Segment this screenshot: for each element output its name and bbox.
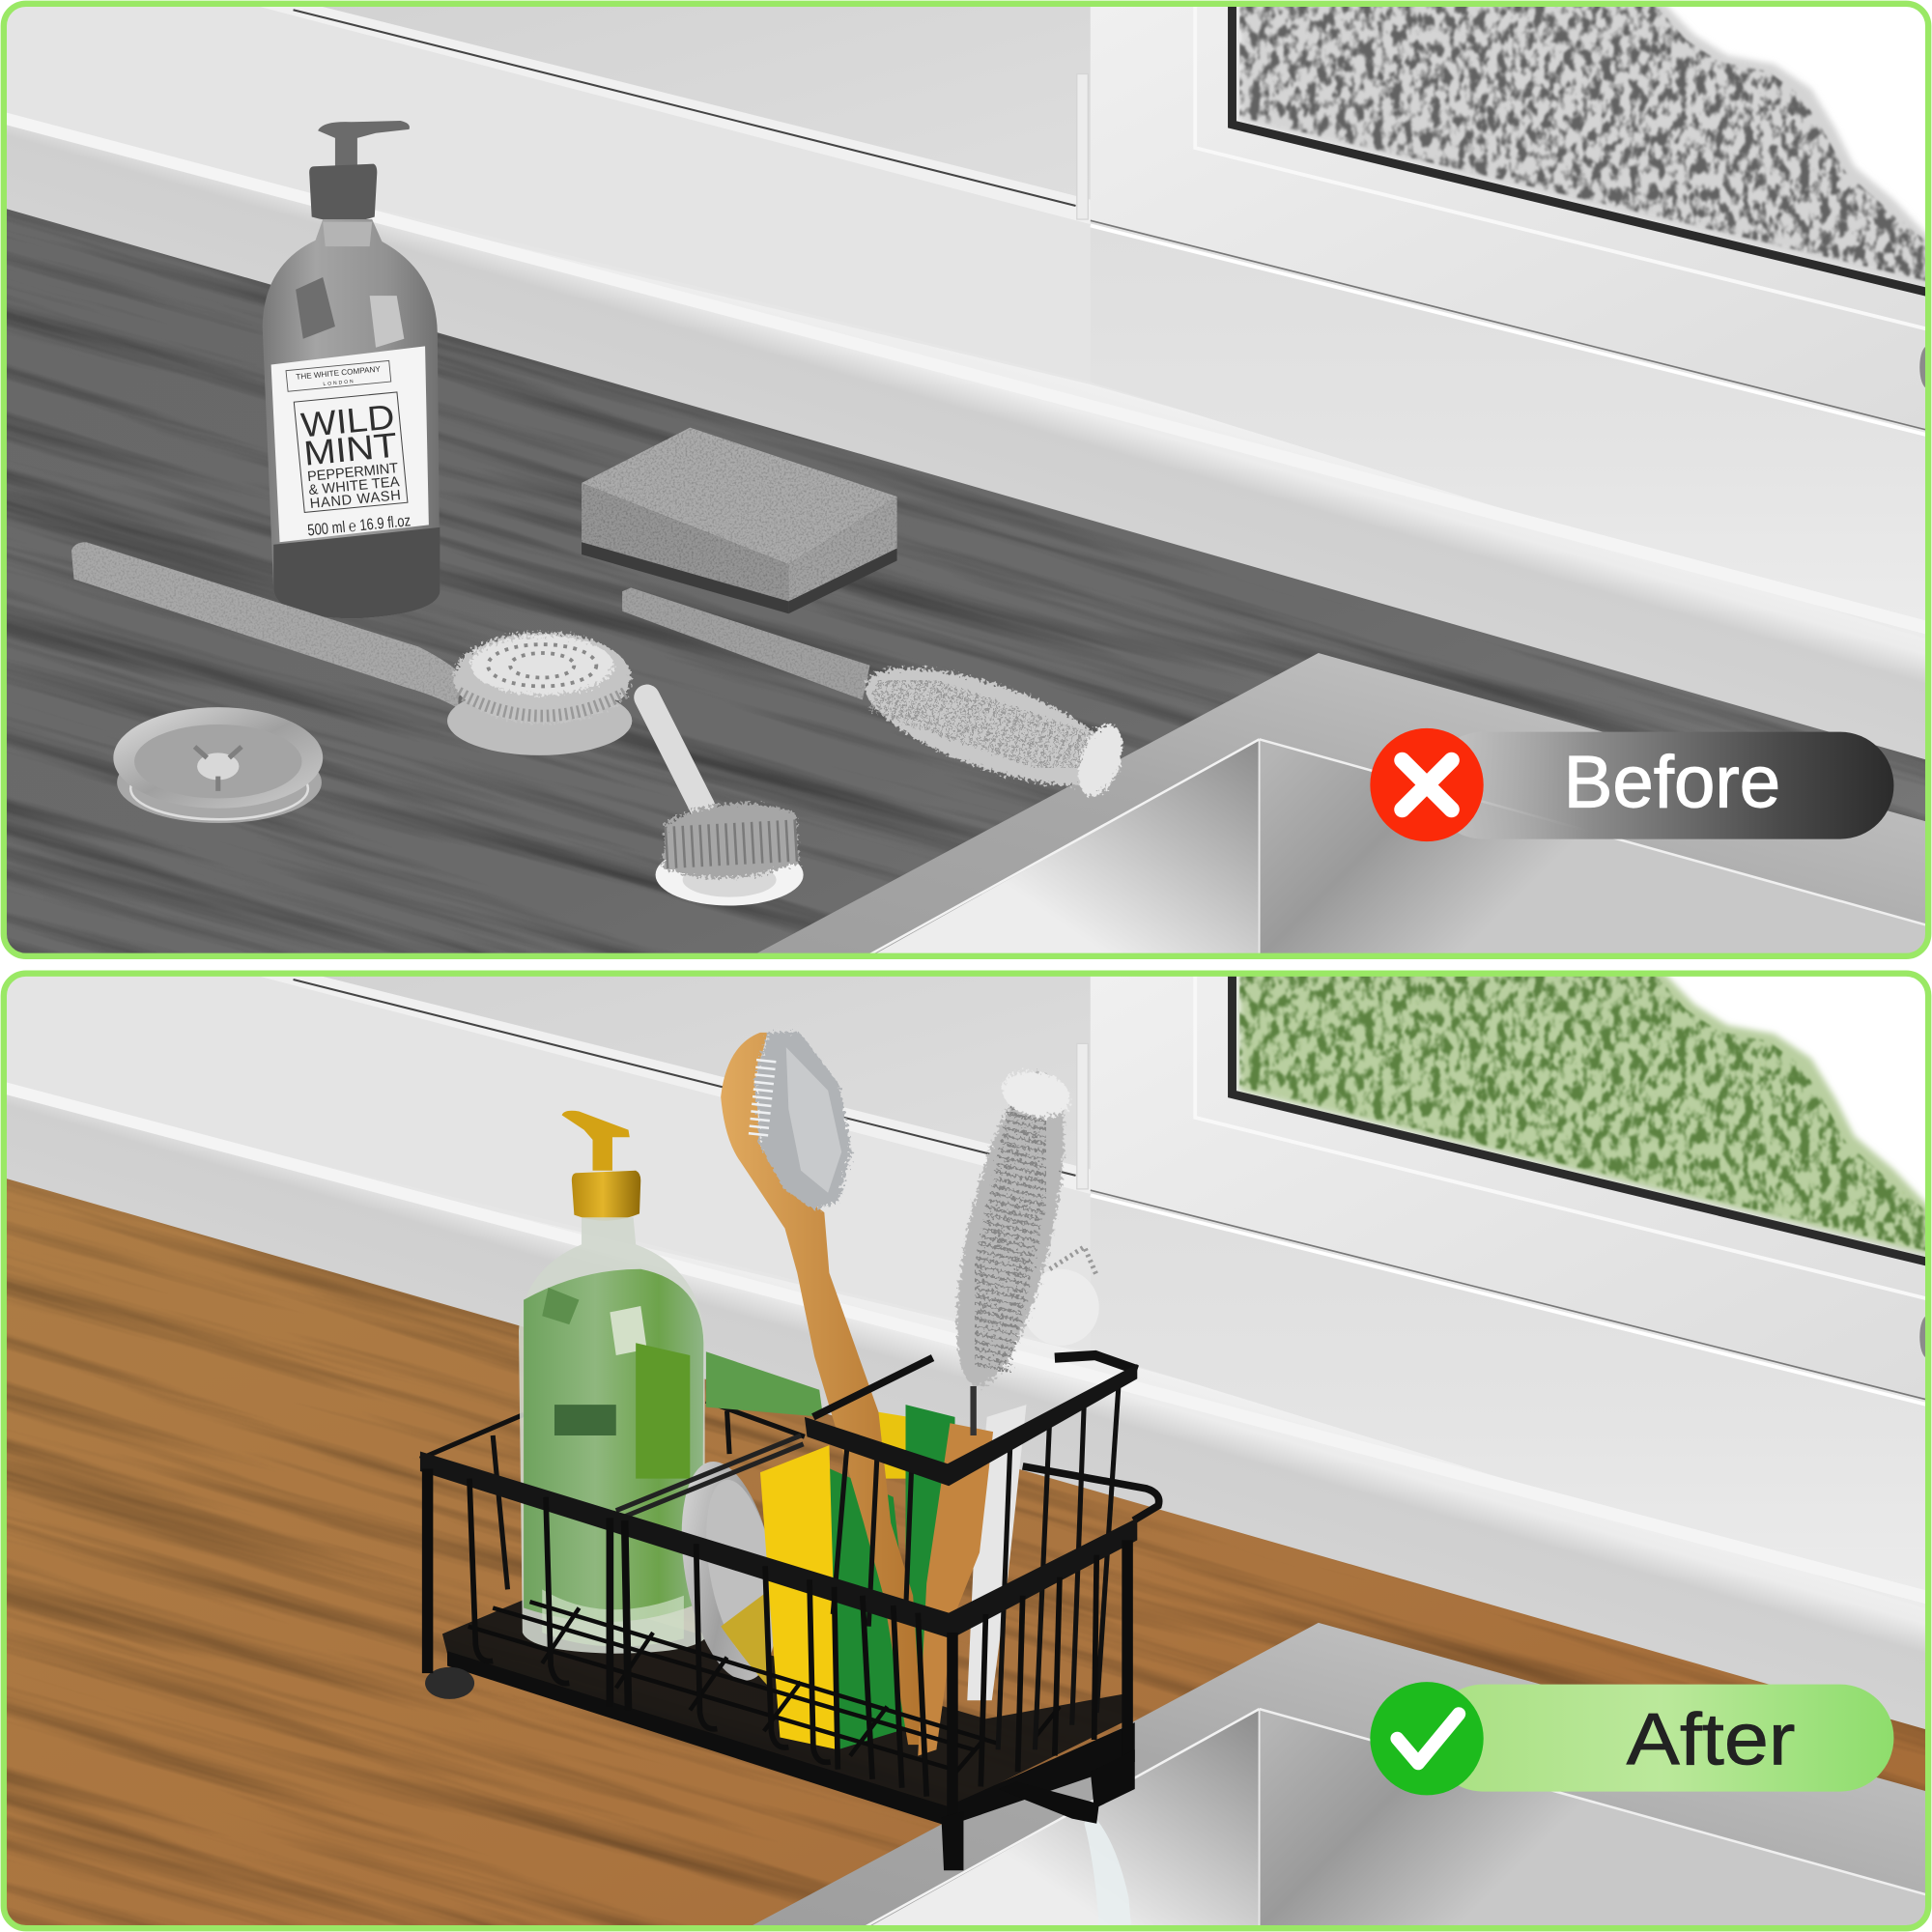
bottle label: PEPPERMINT [306, 461, 399, 485]
badge pill [1430, 1685, 1893, 1792]
bottle label: 500 ml ℮ 16.9 fl.oz [306, 511, 412, 539]
soap bottle, gray [263, 121, 440, 618]
badge pill [1430, 732, 1893, 839]
caddy floor [442, 1589, 1122, 1808]
second wooden handle [918, 1423, 993, 1756]
window frame [1233, 970, 1932, 1263]
bottle brush, gray [622, 587, 1131, 810]
panel border [4, 974, 1928, 1928]
dish brush, white [967, 1247, 1099, 1700]
caddy front wires [428, 1468, 1127, 1846]
countertop, wood [0, 1177, 1932, 1931]
caddy upper basket [813, 1355, 1137, 1749]
bottle label: LONDON [323, 379, 355, 387]
bottle brush [935, 1065, 1086, 1435]
badge label: before: Before [1564, 741, 1780, 823]
green sponge back [706, 1351, 823, 1417]
caddy divider [616, 1435, 804, 1518]
bottle label: & WHITE TEA [308, 474, 400, 498]
drain strainer [667, 1454, 792, 1688]
wooden scrub brush [721, 1033, 923, 1745]
caddy base tray [447, 1602, 1135, 1826]
caddy foot left [425, 1667, 474, 1699]
panel border [4, 4, 1928, 956]
after badge [1370, 1682, 1893, 1795]
sponge, gray [582, 428, 897, 613]
panel: before [0, 0, 1932, 961]
bottle label: WILD [299, 397, 396, 444]
caddy rack [420, 1355, 1137, 1870]
icon: green check [1370, 1682, 1484, 1795]
bottle label: MINT [302, 426, 399, 473]
caddy side foot and clip [941, 1749, 1135, 1870]
window foliage, green [1239, 970, 1932, 1256]
yellow sponge front [760, 1445, 838, 1749]
bottle label [271, 346, 429, 542]
soap bottle, green [519, 1111, 705, 1654]
badge label: after: After [1627, 1699, 1795, 1781]
caddy: back wires [420, 1401, 1159, 1589]
icon: red cross [1370, 728, 1484, 841]
panel: after [0, 970, 1932, 1931]
dish brush, gray [647, 697, 804, 906]
drain strainer, gray [113, 707, 323, 823]
bottle label: THE WHITE COMPANY [296, 364, 382, 382]
bottle label: HAND WASH [309, 488, 402, 512]
countertop, gray [0, 207, 1932, 961]
before badge [1370, 728, 1893, 841]
sink drain water [1084, 1811, 1131, 1924]
caddy front rim [420, 1452, 1137, 1638]
sponges [824, 1405, 955, 1749]
window foliage, grayscale [1239, 0, 1932, 286]
long-handled brush, gray [71, 542, 632, 755]
window frame [1233, 0, 1932, 294]
